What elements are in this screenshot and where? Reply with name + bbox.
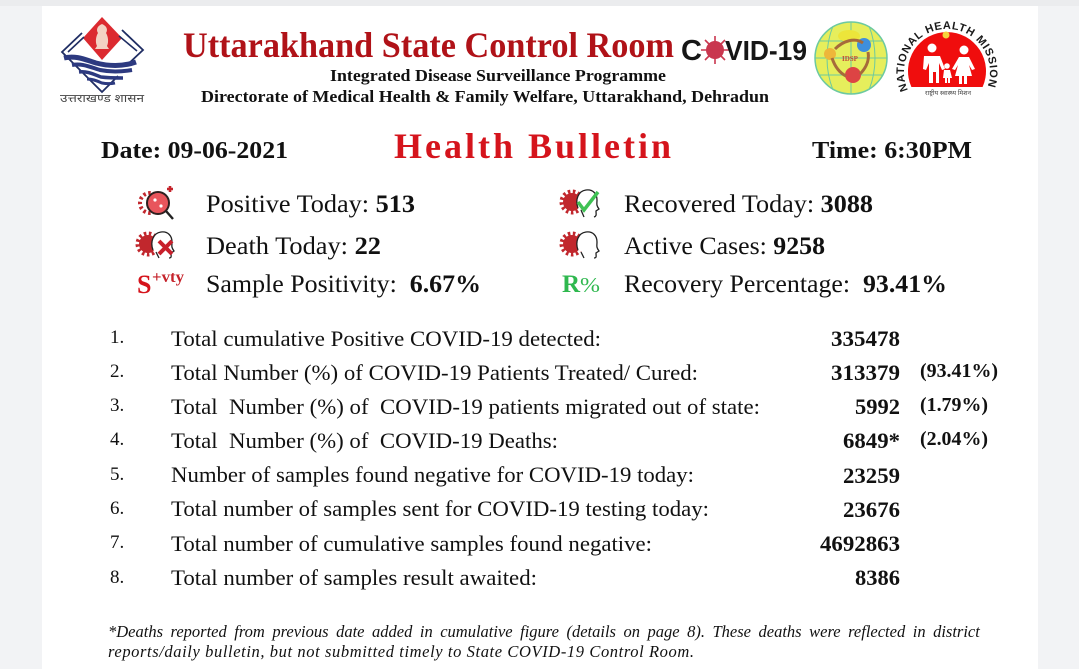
list row 2: (93.41%)	[920, 361, 998, 382]
footnote	[108, 622, 980, 661]
icon: IDSP globe logo: IDSP	[842, 55, 859, 63]
list row 3: 3.	[110, 395, 124, 416]
heading: Health Bulletin: Health Bulletin	[394, 126, 674, 166]
subtitle: directorate: Directorate of Medical Health & Family Welfare, Uttarakhand, Dehradun	[201, 87, 770, 106]
list row 4: (2.04%)	[920, 429, 988, 450]
icon: COVID-19 wordmark: C	[681, 35, 702, 67]
icon: recovery percentage	[562, 271, 600, 298]
icon: National Health Mission logo: NATIONAL HEALTH MISSION	[896, 21, 998, 92]
list row 1: 335478	[831, 326, 900, 351]
icon: Uttarakhand government logo: उत्तराखण्ड शासन	[60, 93, 145, 105]
list row 1: Total cumulative Positive COVID-19 detected:	[171, 326, 601, 351]
icon: positive today	[140, 186, 173, 219]
list row 6: 23676	[843, 497, 900, 522]
list row 7: Total number of cumulative samples found negative:	[171, 531, 652, 556]
list row 7	[110, 531, 900, 556]
list row 6: Total number of samples sent for COVID-19 testing today:	[171, 496, 709, 521]
list row 6: 6.	[110, 498, 124, 519]
subtitle: programme: Integrated Disease Surveillance Programme	[330, 66, 666, 85]
icon: recovery percentage: %	[580, 273, 600, 297]
stat: positive today: Positive Today: 513	[206, 191, 415, 218]
footnote: reports/daily bulletin, but not submitted timely to State COVID-19 Control Room.	[108, 642, 694, 661]
list row 8: 8.	[110, 567, 124, 588]
stat: death today: Death Today: 22	[206, 233, 381, 260]
list row 7: 7.	[110, 532, 124, 553]
list row 8: Total number of samples result awaited:	[171, 565, 537, 590]
time: Time: 6:30PM	[812, 138, 972, 164]
icon: sample positivity	[137, 269, 184, 299]
icon: recovered today	[562, 190, 599, 217]
icon: death today	[138, 232, 174, 258]
date: Date: 09-06-2021	[101, 138, 288, 164]
list row 4: 4.	[110, 429, 124, 450]
icon: COVID-19 wordmark	[681, 35, 807, 67]
list row 7: 4692863	[820, 531, 900, 556]
footnote: *Deaths reported from previous date added in cumulative figure (details on page 8). These deaths were reflected in district	[108, 622, 980, 641]
stat: active cases: Active Cases: 9258	[624, 233, 825, 260]
icon: active cases	[562, 232, 599, 258]
list row 4	[110, 428, 988, 453]
list row 3: Total Number (%) of COVID-19 patients migrated out of state:	[171, 394, 760, 419]
icon: sample positivity: +vty	[152, 269, 184, 286]
icon: COVID-19 wordmark: VID-19	[725, 35, 807, 66]
list row 3: (1.79%)	[920, 395, 988, 416]
list row 4: Total Number (%) of COVID-19 Deaths:	[171, 428, 558, 453]
icon: IDSP globe logo	[815, 22, 887, 94]
stat: recovered today: Recovered Today: 3088	[624, 191, 873, 218]
list row 3	[110, 394, 988, 419]
list row 8	[110, 565, 900, 590]
list row 2: Total Number (%) of COVID-19 Patients Treated/ Cured:	[171, 360, 698, 385]
list row 3: 5992	[855, 394, 900, 419]
list row 2: 313379	[831, 360, 900, 385]
list row 1: 1.	[110, 327, 124, 348]
stat: recovery percentage: Recovery Percentage: 93.41%	[624, 271, 947, 298]
list row 2	[110, 360, 998, 385]
icon: Uttarakhand government logo	[60, 17, 145, 105]
list row 6	[110, 496, 900, 522]
icon: sample positivity: S	[137, 270, 151, 299]
list row 4: 6849*	[843, 428, 900, 453]
list row 5	[110, 462, 900, 488]
icon: recovery percentage: R	[562, 271, 581, 298]
list row 1	[110, 326, 900, 351]
list row 5: 23259	[843, 463, 900, 488]
list row 5: Number of samples found negative for COVID-19 today:	[171, 462, 694, 487]
list row 2: 2.	[110, 361, 124, 382]
list row 5: 5.	[110, 464, 124, 485]
icon: National Health Mission logo: राष्ट्रीय स्वास्थ्य मिशन	[925, 89, 971, 97]
list row 8: 8386	[855, 565, 900, 590]
title: Uttarakhand State Control Room	[183, 25, 674, 65]
stat: sample positivity: Sample Positivity: 6.67%	[206, 271, 481, 298]
